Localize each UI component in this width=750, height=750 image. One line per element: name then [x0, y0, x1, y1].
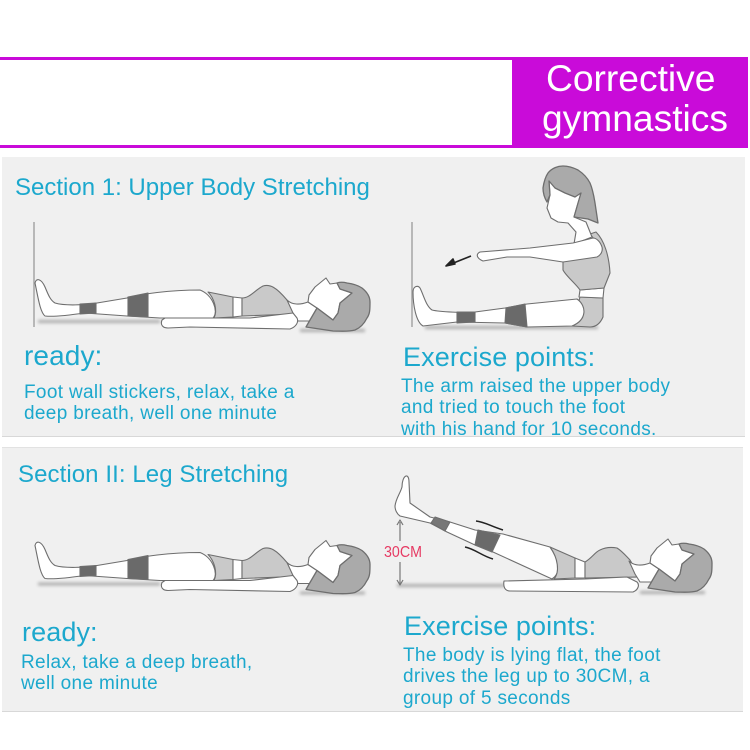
- text: exercise points 1: The arm raised the upper body: [401, 376, 670, 397]
- neck: [629, 561, 659, 582]
- panel: section 1 background: [2, 157, 745, 437]
- text: exercise points 1: [401, 376, 670, 440]
- motion mark upper: [476, 521, 503, 530]
- heading: ready 1: ready:: [24, 340, 102, 371]
- raised leg and foot: [395, 476, 558, 579]
- face: [650, 539, 694, 581]
- heading: section 1: Section 1: Upper Body Stretching: [15, 174, 370, 201]
- text: ready 2: well one minute: [21, 673, 158, 694]
- height label: 30CM: [384, 544, 422, 561]
- text: exercise points 2: The body is lying flat, the foot: [403, 645, 661, 666]
- banner bottom rule: [0, 145, 748, 148]
- text: exercise points 2: drives the leg up to 30CM, a: [403, 666, 650, 687]
- text: exercise points 1: with his hand for 10 seconds.: [401, 419, 657, 440]
- ankle band: [80, 303, 96, 314]
- arm: [161, 313, 298, 329]
- direction arrow: [446, 256, 471, 266]
- neck: [287, 300, 317, 321]
- heading: section 2: Section II: Leg Stretching: [18, 461, 288, 488]
- top: [242, 285, 295, 316]
- illustration: leg raised figure: [384, 476, 712, 594]
- text: ready 1: deep breath, well one minute: [24, 403, 277, 424]
- hair: [648, 543, 712, 592]
- arm: [161, 576, 298, 592]
- heading: exercise points 1: Exercise points:: [403, 342, 595, 372]
- wall line: [33, 222, 35, 327]
- waistband: [575, 558, 585, 578]
- floor shadow: [38, 582, 365, 594]
- leg and foot: [413, 286, 584, 327]
- hair: [306, 545, 370, 594]
- floor shadow: [425, 326, 598, 329]
- text: exercise points 2: [403, 645, 661, 709]
- banner top rule: [0, 57, 748, 60]
- face: [308, 278, 352, 320]
- arm: [477, 238, 602, 262]
- panel: section 2 background: [2, 447, 743, 712]
- knee band: [475, 530, 500, 552]
- top: [242, 548, 295, 578]
- waistband: [233, 560, 242, 580]
- leg and foot: [35, 542, 215, 580]
- illustration: lying figure at rest: [35, 540, 370, 594]
- waistband: [579, 288, 604, 298]
- text: ready 1: [24, 382, 295, 424]
- knee band: [505, 304, 527, 327]
- text: exercise points 1: and tried to touch the foot: [401, 397, 625, 418]
- title line 2: gymnastics: [542, 97, 728, 139]
- height arrow: [397, 520, 403, 585]
- knee band: [128, 556, 148, 580]
- top: [563, 232, 610, 290]
- knee band: [128, 293, 148, 317]
- shorts: [208, 554, 233, 580]
- title box: [512, 57, 748, 148]
- shorts: [550, 547, 575, 579]
- motion mark lower: [465, 547, 493, 559]
- hair: [543, 166, 598, 223]
- arm: [504, 577, 638, 592]
- illustration: sitting figure reaching: [412, 166, 610, 329]
- text: ready 2: [21, 652, 252, 694]
- shorts: [572, 297, 603, 327]
- waistband: [233, 297, 242, 317]
- header banner: [0, 57, 748, 148]
- heading: exercise points 2: Exercise points:: [404, 611, 596, 641]
- title line 1: Corrective: [546, 57, 715, 99]
- neck: [287, 562, 317, 584]
- wall line: [411, 222, 413, 327]
- heading: ready 2: ready:: [22, 617, 98, 647]
- floor shadow: [397, 584, 705, 594]
- ankle band: [431, 517, 450, 531]
- illustration: lying figure at wall: [34, 222, 370, 332]
- text: ready 1: Foot wall stickers, relax, take a: [24, 382, 295, 403]
- neck and face: [547, 181, 592, 244]
- floor shadow: [38, 320, 365, 332]
- text: ready 2: Relax, take a deep breath,: [21, 652, 252, 673]
- text: exercise points 2: group of 5 seconds: [403, 688, 571, 709]
- ankle band: [80, 566, 96, 576]
- ankle band: [457, 312, 475, 323]
- shorts: [208, 292, 233, 318]
- hair: [306, 282, 370, 331]
- top: [585, 547, 640, 578]
- leg and foot: [35, 280, 215, 318]
- face: [308, 540, 352, 582]
